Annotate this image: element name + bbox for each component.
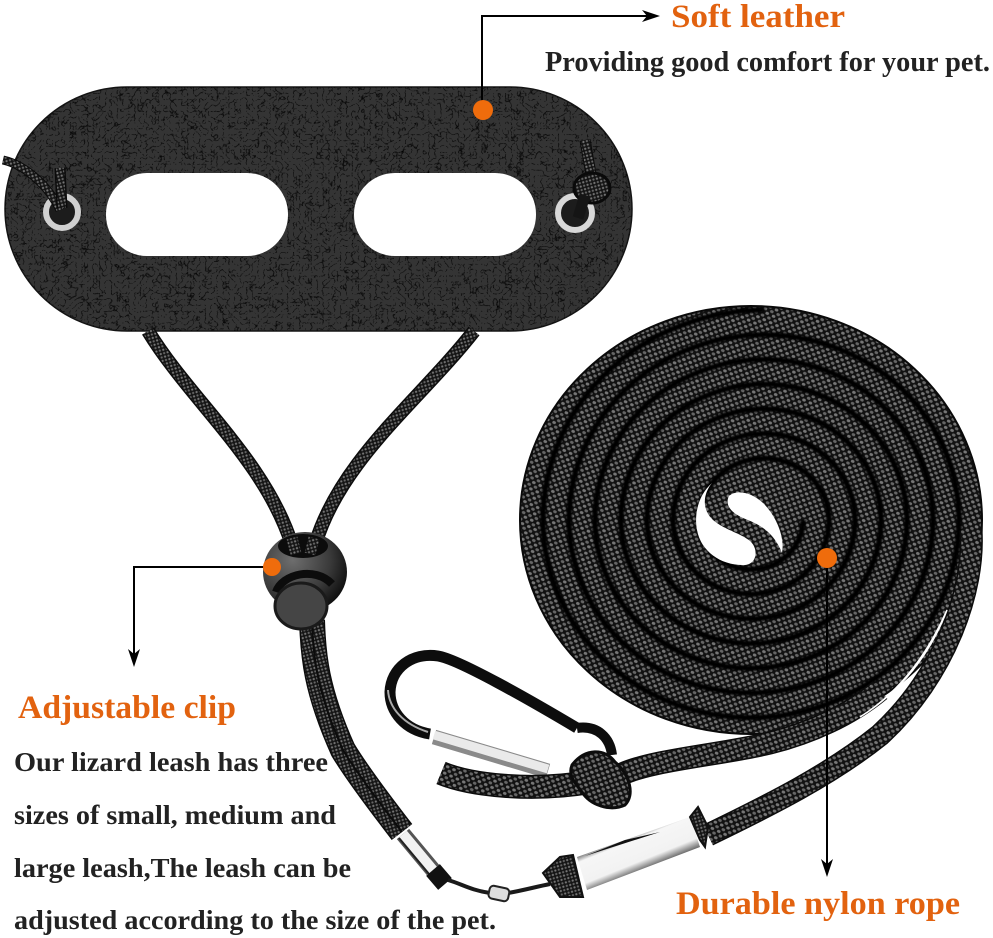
rope to knot: [620, 690, 880, 775]
text: soft leather description: Providing good comfort for your pet.: [545, 47, 990, 78]
slot right: [354, 173, 536, 256]
text: adjustable clip description: Our lizard leash has three: [14, 747, 328, 777]
slot left: [106, 173, 288, 256]
rope stub and knot: [441, 752, 630, 808]
coiled nylon rope: [520, 306, 982, 835]
metal tube on rope end: [543, 807, 708, 897]
white gap between rope turns: [860, 610, 947, 717]
heading: durable nylon rope: Durable nylon rope: [676, 886, 960, 922]
adjustable clip bead: [263, 532, 347, 629]
text: adjustable clip description: large leash,The leash can be: [14, 853, 351, 883]
left grommet with cord knot: [3, 160, 78, 228]
swivel: [448, 880, 550, 893]
carabiner gate: [434, 737, 548, 771]
heading: adjustable clip: Adjustable clip: [18, 690, 236, 726]
heading: soft leather: Soft leather: [671, 0, 845, 35]
leather patch with slots and grommets: [3, 87, 632, 331]
text: adjustable clip description: [14, 747, 496, 935]
right grommet with cord knot: [558, 140, 610, 230]
lower cord, metal tip and swivel: [312, 620, 550, 902]
text: adjustable clip description: adjusted according to the size of the pet.: [14, 905, 496, 935]
callout line: nylon rope: [817, 548, 837, 877]
carabiner: [388, 655, 630, 808]
crimp left: [433, 870, 445, 884]
callout line: soft leather: [473, 10, 660, 120]
text: adjustable clip description: sizes of small, medium and: [14, 800, 336, 830]
coil centre gap: [696, 483, 783, 565]
loop cords to clip: [148, 331, 474, 545]
outer rope to metal tube: [708, 530, 971, 835]
callout line: adjustable clip: [128, 558, 281, 667]
metal tip: [403, 834, 433, 870]
